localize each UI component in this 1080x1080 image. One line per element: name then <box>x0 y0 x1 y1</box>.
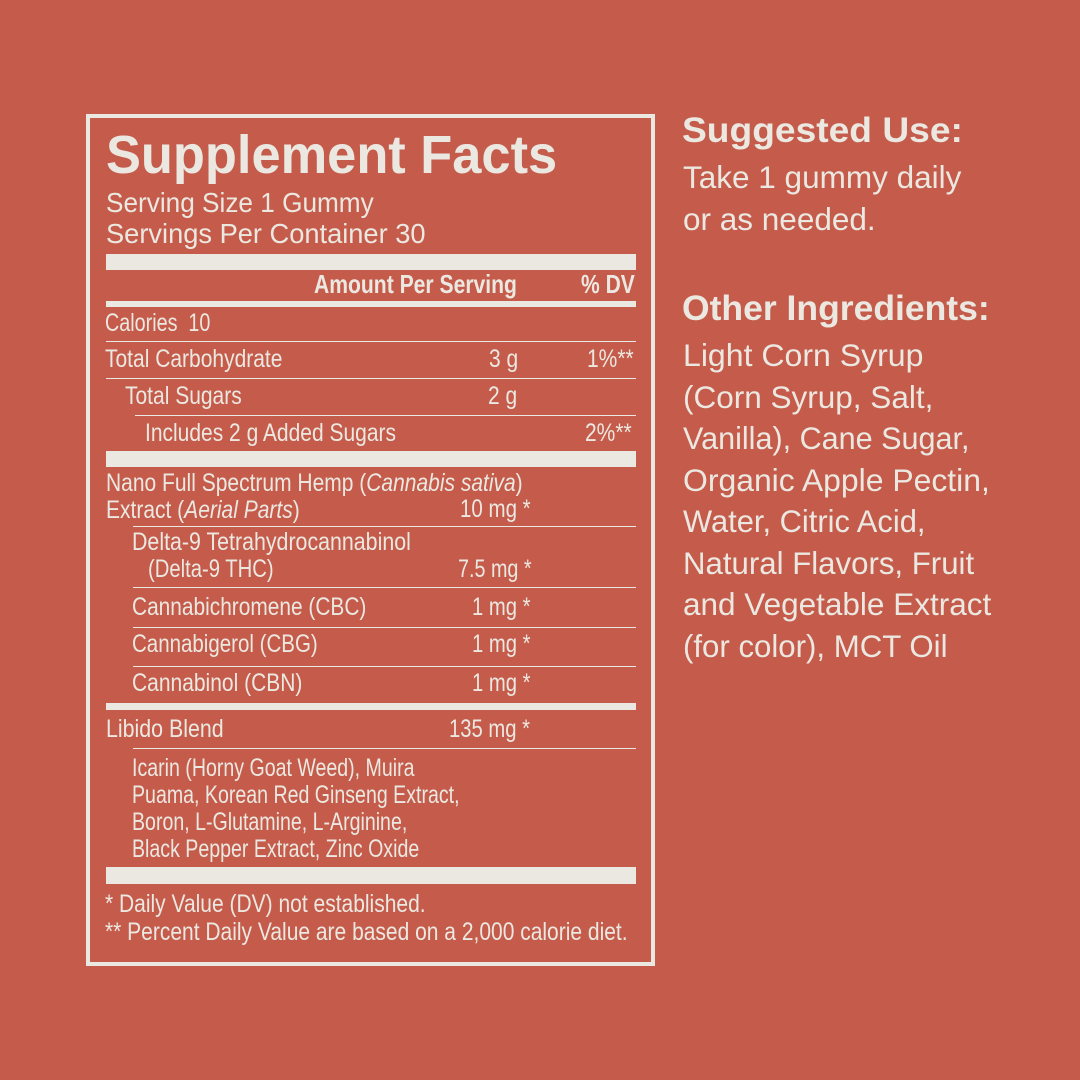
row: CBG: Cannabigerol (CBG) <box>132 630 318 658</box>
heading: suggested use: Suggested Use: <box>682 110 963 150</box>
rule <box>106 378 636 379</box>
row: libido blend: Libido Blend <box>106 715 224 743</box>
row: total sugars: Total Sugars <box>125 382 242 410</box>
value: libido amount: 135 mg * <box>449 715 530 743</box>
panel: supplement facts label <box>86 114 655 966</box>
text: suggested use: Take 1 gummy daily <box>683 159 961 195</box>
text: other ingredients: Vanilla), Cane Sugar, <box>683 420 969 456</box>
rule <box>133 587 636 588</box>
rule <box>133 526 636 527</box>
value: sugars amount: 2 g <box>488 382 517 410</box>
text: other ingredients: Natural Flavors, Fruit <box>683 544 974 580</box>
text: libido blend ingredients: Puama, Korean Red Ginseng Extract, <box>132 781 460 809</box>
value: CBC amount: 1 mg * <box>472 593 531 621</box>
row: CBC: Cannabichromene (CBC) <box>132 593 366 621</box>
text: suggested use: or as needed. <box>683 200 876 236</box>
value: carbohydrate dv: 1%** <box>587 345 634 373</box>
row: calories: Calories 10 <box>105 309 210 337</box>
text: other ingredients: Light Corn Syrup <box>683 337 923 373</box>
row: added sugars: Includes 2 g Added Sugars <box>145 419 396 447</box>
rule <box>133 666 636 667</box>
value: hemp amount: 10 mg * <box>460 495 531 523</box>
row: hemp extract: Nano Full Spectrum Hemp (Cannabis sativa) <box>106 469 523 497</box>
text: other ingredients: (for color), MCT Oil <box>683 628 948 664</box>
footnotes <box>105 890 628 946</box>
text: other ingredients: Water, Citric Acid, <box>683 503 925 539</box>
thick rule: bottom <box>106 867 636 884</box>
rule <box>135 415 636 416</box>
text: suggested use <box>683 159 962 236</box>
thick rule: mid <box>106 451 636 467</box>
text: other ingredients: (Corn Syrup, Salt, <box>683 378 933 414</box>
heading: other ingredients: Other Ingredients: <box>682 288 990 328</box>
row: hemp extract: Extract (Aerial Parts) <box>106 496 300 524</box>
column header: percent daily value: % DV <box>581 269 635 299</box>
thick rule: top <box>106 254 636 270</box>
value: CBN amount: 1 mg * <box>472 669 531 697</box>
value: added sugars dv: 2%** <box>585 419 632 447</box>
text: other ingredients: and Vegetable Extract <box>683 586 991 622</box>
value: delta-9 amount: 7.5 mg * <box>458 555 532 583</box>
text: libido blend ingredients <box>132 754 460 863</box>
row: delta-9 abbreviation: (Delta-9 THC) <box>148 555 274 583</box>
rule <box>106 341 636 342</box>
row: hemp extract <box>106 469 523 524</box>
value: CBG amount: 1 mg * <box>472 630 531 658</box>
footnotes: ** Percent Daily Value are based on a 2,000 calorie diet. <box>105 918 628 946</box>
thick rule: libido <box>106 703 636 710</box>
footnotes: * Daily Value (DV) not established. <box>105 890 426 918</box>
text: libido blend ingredients: Black Pepper Extract, Zinc Oxide <box>132 835 419 863</box>
text: other ingredients: Organic Apple Pectin, <box>683 462 990 498</box>
row: total carbohydrate: Total Carbohydrate <box>105 345 282 373</box>
text: libido blend ingredients: Icarin (Horny Goat Weed), Muira <box>132 754 414 782</box>
text: serving size: Serving Size 1 Gummy <box>106 187 374 218</box>
value: carbohydrate amount: 3 g <box>489 345 518 373</box>
heading: Supplement Facts: Supplement Facts <box>106 125 557 185</box>
rule <box>133 627 636 628</box>
row: CBN: Cannabinol (CBN) <box>132 669 302 697</box>
column header: amount per serving: Amount Per Serving <box>314 269 517 299</box>
row: delta-9 name: Delta-9 Tetrahydrocannabinol <box>132 528 411 556</box>
text: servings per container: Servings Per Container 30 <box>106 218 426 249</box>
text: other ingredients <box>683 337 992 664</box>
rule <box>133 748 636 749</box>
thick rule: under header <box>106 301 636 307</box>
text: libido blend ingredients: Boron, L-Glutamine, L-Arginine, <box>132 808 407 836</box>
